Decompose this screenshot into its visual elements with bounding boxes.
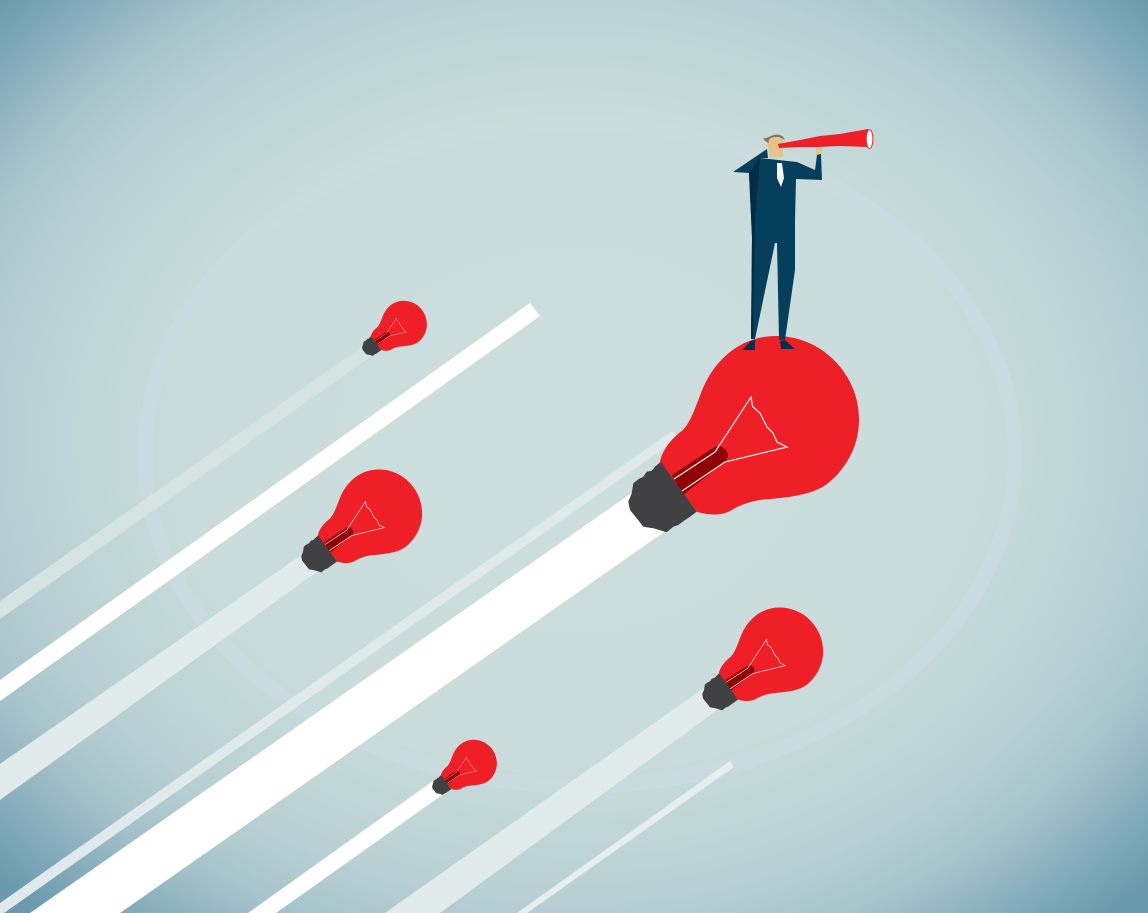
medium light bulb, left [301, 469, 422, 572]
head [767, 137, 783, 158]
telescope [778, 129, 868, 148]
telescope lens [866, 130, 873, 148]
small light bulb, bottom [432, 740, 497, 795]
suit shadow [749, 158, 760, 339]
small light bulb, top [362, 301, 427, 356]
background ring [145, 124, 1015, 786]
businessman with telescope [733, 129, 873, 350]
suit [733, 149, 822, 340]
hand [816, 147, 822, 155]
shoes [742, 340, 795, 350]
speed trails [0, 303, 734, 913]
hair [763, 135, 785, 143]
tie [777, 163, 784, 187]
large light bulb [628, 336, 859, 532]
medium light bulb, right [702, 607, 823, 710]
